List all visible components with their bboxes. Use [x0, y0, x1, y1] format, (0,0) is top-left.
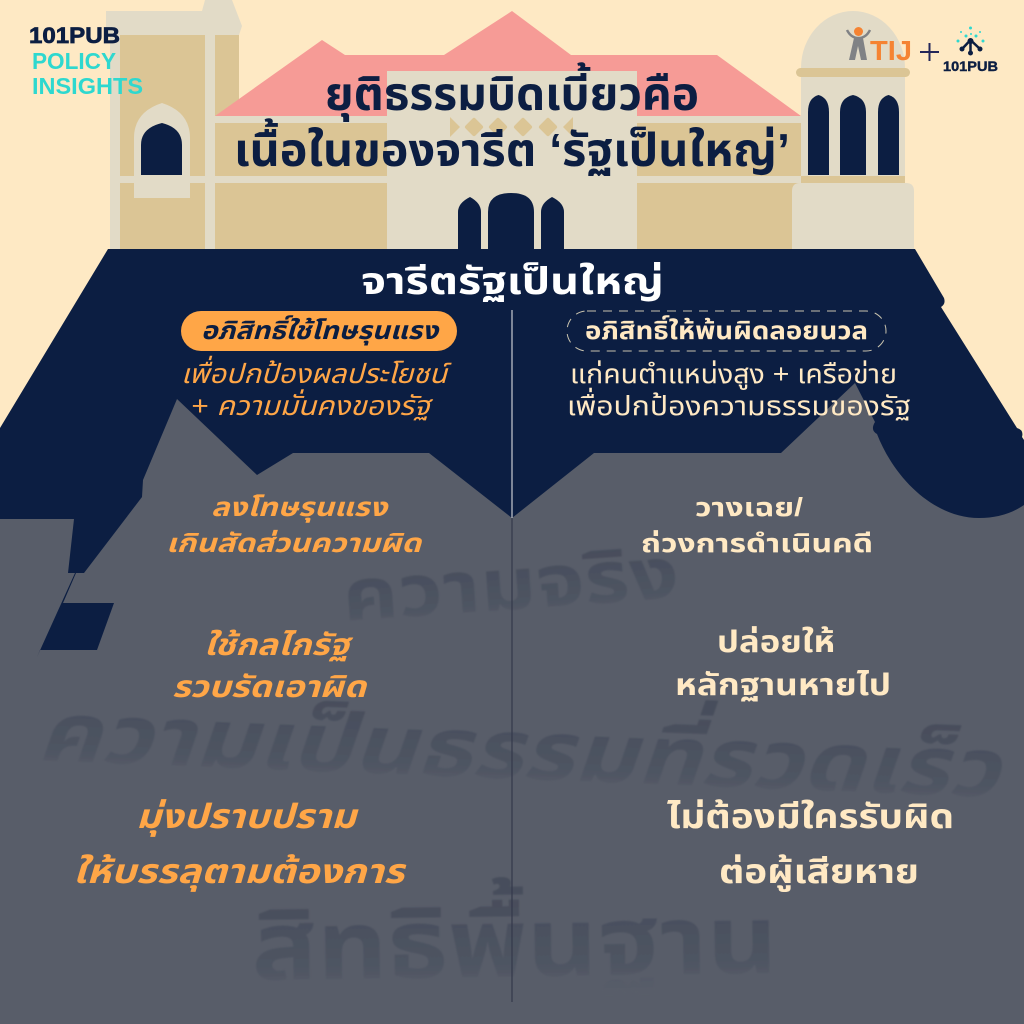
- panel: right column header: [567, 311, 911, 421]
- orange pill label: อภิสิทธิ์ใช้โทษรุนแรง: [201, 314, 440, 346]
- logo: 101PUB Policy Insights: 101PUB: [29, 23, 120, 48]
- dashed pill label: อภิสิทธิ์ให้พ้นผิดลอยนวล: [585, 314, 868, 345]
- grey ground panel: [0, 383, 1024, 1024]
- item: harsh punishment: ลงโทษรุนแรง: [211, 492, 390, 523]
- logo: 101PUB Policy Insights: INSIGHTS: [32, 73, 143, 99]
- item: neglect: วางเฉย/: [695, 492, 803, 522]
- item: state machinery: ใช้กลไกรัฐ: [204, 629, 353, 662]
- item: no one accountable: [667, 798, 954, 892]
- ghost text: truth: ความจริง: [340, 534, 681, 637]
- right description: เพื่อปกป้องความธรรมของรัฐ: [567, 387, 911, 421]
- title: ยุติธรรมบิดเบี้ยวคือ: [325, 62, 699, 122]
- right description: แก่คนตำแหน่งสูง + เครือข่าย: [570, 359, 897, 390]
- left description: เพื่อปกป้องผลประโยชน์: [181, 355, 452, 389]
- item: suppression: ให้บรรลุตามต้องการ: [73, 853, 407, 892]
- item: suppression: มุ่งปราบปราม: [136, 798, 359, 837]
- right column items: [641, 492, 954, 892]
- logo: 101PUB Policy Insights: [29, 23, 143, 99]
- main wings: [215, 116, 801, 250]
- title: [234, 62, 790, 176]
- item: suppression: [73, 798, 407, 892]
- navy shadow panel: [0, 249, 1024, 1024]
- centre divider: [511, 310, 513, 1002]
- logo: TIJ: [847, 27, 912, 66]
- logo: 101PUB Policy Insights: POLICY: [32, 48, 116, 74]
- item: state machinery: รวบรัดเอาผิด: [172, 671, 368, 704]
- heading: จารีตรัฐเป็นใหญ่: [361, 261, 664, 302]
- dashed pill label: [567, 311, 886, 351]
- right tower: [792, 11, 914, 250]
- item: harsh punishment: [166, 492, 423, 558]
- title: เนื้อในของจารีต ‘รัฐเป็นใหญ่’: [234, 118, 790, 176]
- item: neglect: [641, 492, 873, 558]
- illustration: government building: [106, 0, 914, 250]
- plus sign: [920, 43, 939, 61]
- ghost text: basic rights: สิทธิพื้นฐาน: [251, 873, 778, 1001]
- roof: [215, 11, 801, 116]
- item: no one accountable: ไม่ต้องมีใครรับผิด: [667, 798, 954, 836]
- item: neglect: ถ่วงการดำเนินคดี: [641, 528, 873, 558]
- left description: + ความมั่นคงของรัฐ: [191, 389, 434, 421]
- item: state machinery: [172, 629, 368, 704]
- item: harsh punishment: เกินสัดส่วนความผิด: [166, 528, 423, 558]
- logo: 101PUB small: 101PUB: [943, 59, 998, 74]
- logo: 101PUB small: [943, 26, 998, 74]
- item: evidence disappears: ปล่อยให้: [717, 626, 835, 659]
- right description: [567, 359, 911, 421]
- item: evidence disappears: หลักฐานหายไป: [675, 669, 891, 702]
- central block: [387, 71, 637, 250]
- ghost text: swift justice: ความเป็นธรรมที่รวดเร็ว: [35, 674, 1005, 815]
- orange pill label: [181, 311, 457, 351]
- left description: [181, 355, 452, 421]
- panel: left column header: [181, 311, 457, 421]
- item: no one accountable: ต่อผู้เสียหาย: [719, 853, 919, 892]
- navy window shadow: [37, 573, 114, 657]
- item: evidence disappears: [675, 626, 891, 702]
- logo: TIJ: TIJ: [870, 35, 912, 66]
- left column items: [73, 492, 423, 892]
- left tower: [106, 0, 242, 250]
